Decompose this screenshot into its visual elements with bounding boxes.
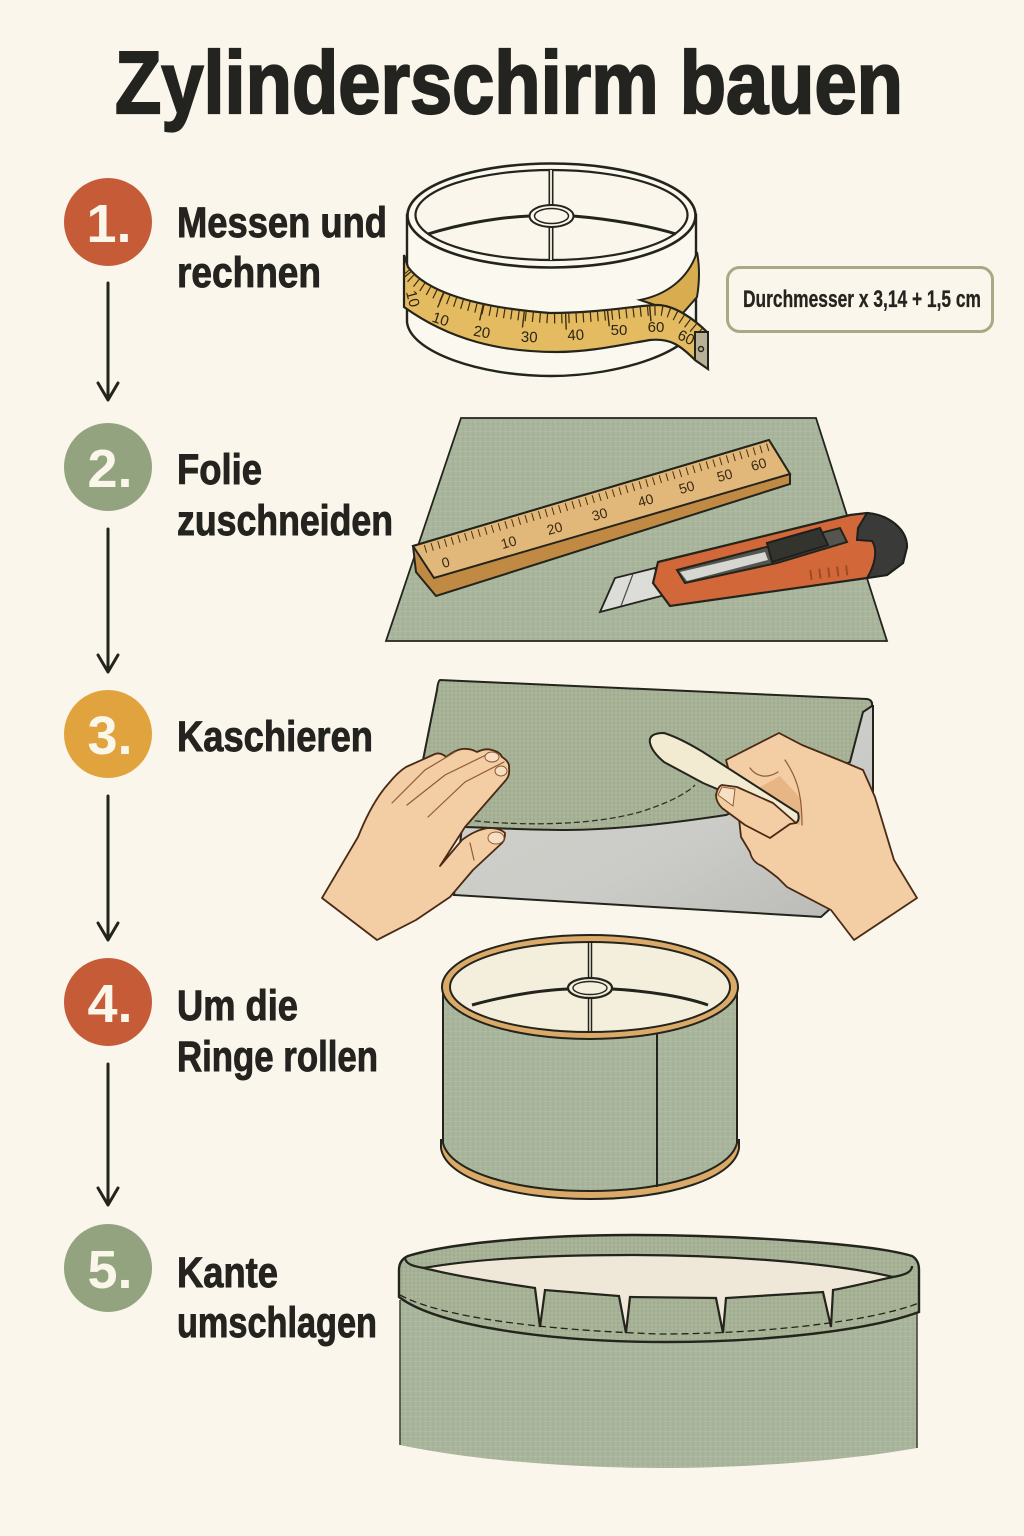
measuring tape: 60 (648, 319, 664, 336)
measuring tape: 50 (611, 322, 627, 339)
measuring tape (402, 252, 708, 369)
left hand (322, 749, 509, 940)
step 5 number badge (64, 1224, 152, 1312)
top ring (442, 935, 738, 1039)
seam (656, 1033, 658, 1187)
measuring tape: 30 (520, 329, 538, 346)
illustration: cylinder wrapped with fabric (441, 935, 739, 1199)
right hand (726, 733, 917, 940)
arrow 2 to 3 (98, 529, 118, 672)
step 3 number badge (64, 690, 152, 778)
title: Zylinderschirm bauen (115, 33, 903, 132)
step 2 number badge: 2. (87, 439, 133, 499)
step 3 label: Kaschieren (177, 713, 373, 761)
formula callout (728, 268, 992, 332)
step 4 number badge: 4. (87, 974, 133, 1034)
grey adhesive sheet (454, 706, 873, 917)
wooden ruler: 0 (440, 553, 452, 571)
step 5 label: Kante (177, 1249, 278, 1297)
step 5 number badge: 5. (87, 1240, 133, 1300)
illustration: laminating fabric with hands and bone folder (322, 680, 917, 940)
step 4 label: Um die (177, 982, 298, 1030)
step 1 label: rechnen (177, 249, 321, 297)
wooden ruler: 60 (749, 454, 769, 474)
step 1 number badge: 1. (86, 194, 132, 254)
green sheet (386, 418, 887, 641)
step 2 label: Folie (177, 446, 262, 494)
wooden ruler: 10 (499, 532, 519, 552)
step 2 number badge (64, 423, 152, 511)
arrow 1 to 2 (98, 283, 118, 400)
step 4 label: Ringe rollen (177, 1033, 378, 1081)
wooden ruler (413, 440, 790, 596)
collar (399, 1235, 919, 1342)
step 4 number badge (64, 958, 152, 1046)
wire spokes and hub (472, 943, 708, 1031)
right thumb (716, 785, 796, 838)
green fabric folded over (420, 680, 872, 830)
step 5 label (177, 1249, 377, 1347)
measuring tape: 40 (567, 327, 585, 344)
step 4 label (177, 982, 378, 1081)
wooden ruler: 50 (677, 477, 697, 497)
arrow 3 to 4 (98, 796, 118, 940)
step 2 label (177, 446, 393, 545)
bone folder tool (650, 733, 799, 823)
fabric body (443, 985, 737, 1191)
utility knife (600, 513, 907, 612)
measuring tape: 20 (472, 323, 491, 342)
illustration: folded-over fabric edge with notches (399, 1235, 919, 1468)
stitching (400, 1295, 919, 1334)
wooden ruler: 50 (715, 465, 735, 485)
rim inner edge (405, 1258, 912, 1277)
wooden ruler: 20 (545, 518, 565, 538)
illustration: lampshade ring with measuring tape (402, 164, 708, 376)
step 2 label: zuschneiden (177, 497, 393, 545)
cylinder body (400, 1300, 917, 1468)
bottom ring (441, 1140, 739, 1199)
arrow 4 to 5 (98, 1064, 118, 1205)
wooden ruler: 30 (590, 504, 610, 524)
step 5 label: umschlagen (177, 1299, 377, 1347)
inner opening and notches (424, 1255, 893, 1333)
illustration: foil sheet with ruler and cutter (386, 418, 907, 641)
measuring tape: 60 (675, 327, 697, 349)
measuring tape: 10 (402, 289, 423, 309)
measuring tape: 10 (430, 309, 451, 330)
step 1 label (177, 199, 387, 297)
wooden ruler: 40 (636, 490, 656, 510)
step 1 number badge (64, 178, 152, 266)
step 1 label: Messen und (177, 199, 387, 247)
step 3 number badge: 3. (87, 706, 133, 766)
